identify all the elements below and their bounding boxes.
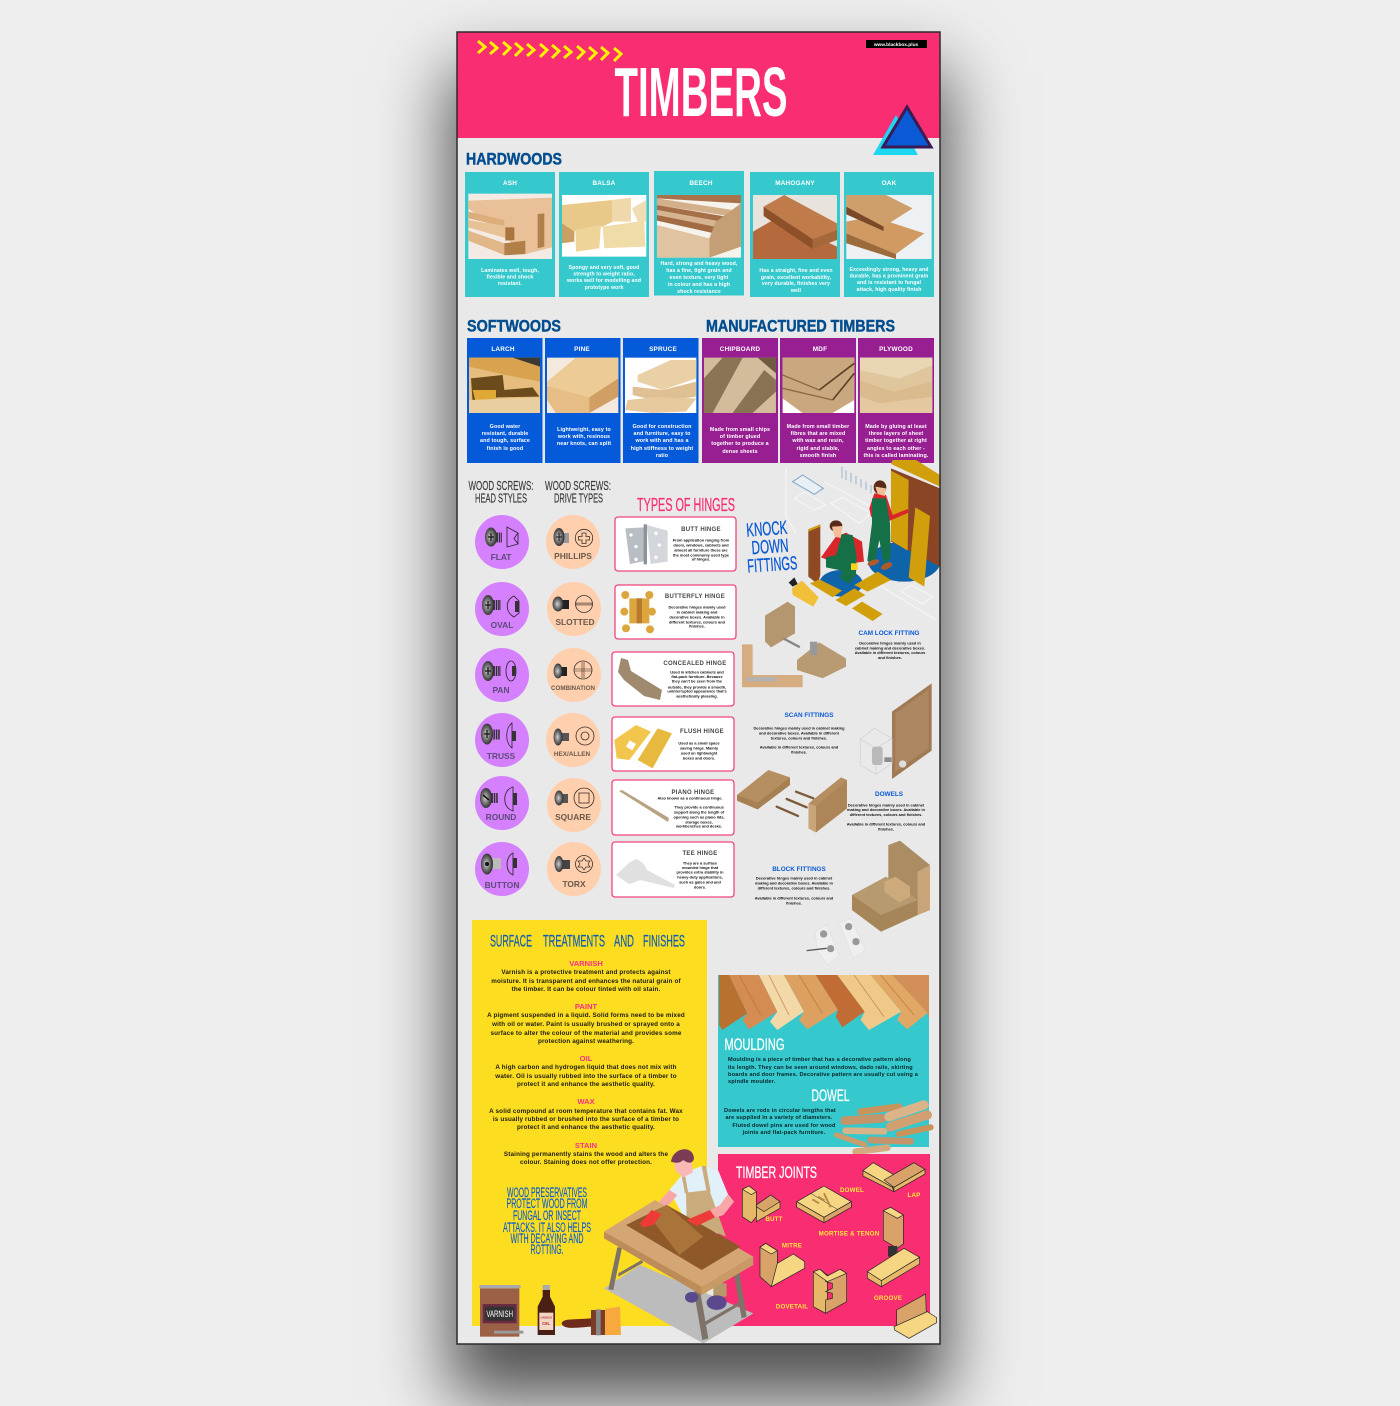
joint: butt xyxy=(742,1186,780,1223)
hinge: tee: heavy-duty applications, xyxy=(677,874,723,880)
card: beech: has a fine, tight grain and xyxy=(666,268,732,274)
joint: groove xyxy=(894,1294,937,1338)
text: varnish: Varnish is a protective treatment and protects against xyxy=(501,969,671,976)
drive: combination xyxy=(547,648,601,702)
heading: surface treatments: SURFACE xyxy=(490,932,532,950)
text: cam lock fitting: CAM LOCK FITTING xyxy=(858,630,920,637)
text: scan fittings: Decorative hinges mainly used in cabinet making xyxy=(753,726,845,730)
screw: button xyxy=(475,842,529,896)
heading: surface treatments: TREATMENTS xyxy=(543,932,605,950)
joint labels: MITRE xyxy=(782,1242,802,1250)
text: dowel description: Fluted dowel pins are used for wood xyxy=(732,1123,836,1129)
worker crouching xyxy=(821,520,864,584)
card: pine xyxy=(545,338,620,463)
joint: mitre xyxy=(760,1243,805,1287)
heading: wood screws drive types: WOOD SCREWS: xyxy=(545,478,611,493)
text: cam lock fitting: Decorative hinges mainly used in xyxy=(859,640,921,646)
image: plywood layers xyxy=(860,358,932,413)
hinge: butterfly: Decorative hinges mainly used xyxy=(668,604,726,610)
panel: hinges xyxy=(612,517,736,897)
screw: truss xyxy=(475,713,529,767)
text: scan fittings: SCAN FITTINGS xyxy=(784,712,834,719)
heading: knock down fittings: KNOCK xyxy=(746,518,788,542)
card: mahogany: well xyxy=(790,288,802,294)
card: larch: finish is good xyxy=(487,446,523,452)
text: dowels: DOWELS xyxy=(875,791,904,798)
triangle logo xyxy=(873,107,931,155)
screw: pan xyxy=(475,648,529,702)
card: mdf xyxy=(780,338,856,463)
screw: flat: FLAT xyxy=(491,552,512,562)
text: oil: A high carbon and hydrogen liquid that does not mix with xyxy=(495,1064,677,1071)
hinge: butt: BUTT HINGE xyxy=(681,527,721,533)
card: spruce: SPRUCE xyxy=(649,346,677,353)
text: scan fittings: finishes. xyxy=(791,750,807,754)
text: scan fittings xyxy=(753,712,845,754)
text: dowels: different textures, colours and finishes. xyxy=(850,812,922,817)
card: mahogany: Has a straight, fine and even xyxy=(759,268,833,274)
text: paint: with oil or water. Paint is usually brushed or sprayed onto a xyxy=(491,1021,680,1028)
panel: surface treatments xyxy=(472,920,707,1326)
text: moulding description: Moulding is a piece of timber that has a decorative pattern along xyxy=(728,1057,911,1063)
card: chipboard: together to produce a xyxy=(711,441,770,447)
text: cam lock fitting xyxy=(855,630,925,660)
text: wood preservatives: FUNGAL OR INSECT xyxy=(513,1208,581,1223)
illustration: block fitting xyxy=(807,841,930,965)
card: larch: LARCH xyxy=(491,346,515,353)
heading: knock down fittings: FITTINGS xyxy=(747,553,798,578)
icon: piano hinge xyxy=(619,790,669,822)
illustration: varnish can: VARNISH xyxy=(486,1309,513,1319)
drive: torx xyxy=(547,842,601,896)
card: pine: PINE xyxy=(574,346,590,353)
drive: combination: COMBINATION xyxy=(551,685,595,692)
text: wood preservatives xyxy=(503,1185,591,1257)
text: paint: PAINT xyxy=(575,1002,597,1011)
heading: wood screws drive types: DRIVE TYPES xyxy=(554,490,603,506)
drive: phillips: PHILLIPS xyxy=(554,551,592,561)
screw: oval: OVAL xyxy=(491,620,513,630)
drive: square: SQUARE xyxy=(555,812,591,822)
card: spruce: ratio xyxy=(656,453,669,459)
illustration: dowel fitting xyxy=(737,770,847,832)
card: ash xyxy=(465,172,555,297)
image: pine plank xyxy=(547,358,618,413)
card: oak: attack, high quality finish xyxy=(857,287,921,293)
hinge: concealed: aesthetically pleasing. xyxy=(676,694,718,698)
hinge: butterfly: in cabinet making and xyxy=(677,610,718,614)
card: pine: near knots, can split xyxy=(557,441,611,447)
screw: round: ROUND xyxy=(486,812,516,822)
hinge: concealed: uninterrupted appearance that's xyxy=(667,688,727,694)
joint: lap xyxy=(863,1163,925,1192)
card: mahogany xyxy=(750,172,840,297)
hinge: tee: doors. xyxy=(694,884,706,890)
card: mahogany: grain, excellent workability, xyxy=(761,275,832,281)
drive: torx: TORX xyxy=(562,879,586,889)
text: varnish: the timber. It can be colour tinted with oil stain. xyxy=(512,986,660,993)
icon: concealed hinge xyxy=(618,658,662,700)
text: block fittings: Decorative hinges mainly used in cabinet xyxy=(756,876,833,880)
text: dowel description: Dowels are rods in circular lengths that xyxy=(724,1108,836,1114)
image: dowel pins xyxy=(837,1105,931,1152)
card: mdf: fibres that are mixed xyxy=(791,431,845,437)
hinge: tee: provides extra stability in xyxy=(677,870,724,874)
text: oil: protect it and enhance the aesthetic quality. xyxy=(517,1081,655,1088)
hinge: butt: of hinges. xyxy=(692,556,710,562)
card: oak: and is resistant to fungal xyxy=(857,280,921,286)
joint labels: MORTISE & TENON xyxy=(819,1230,880,1238)
hinge: piano: Also known as a continuous hinge. xyxy=(657,796,723,800)
text: wax: is usually rubbed or brushed into the surface of a timber to xyxy=(493,1116,679,1123)
heading: surface treatments: FINISHES xyxy=(643,932,685,950)
joint labels: DOWEL xyxy=(840,1187,864,1194)
heading: wood screws head styles: HEAD STYLES xyxy=(475,490,527,506)
illustration: workers assembling wardrobe xyxy=(786,460,940,621)
card: oak xyxy=(844,172,934,297)
heading: types of hinges: TYPES OF HINGES xyxy=(637,495,735,515)
text: wood preservatives: ATTACKS. IT ALSO HELPS xyxy=(503,1220,591,1235)
text: wax: A solid compound at room temperature that contains fat. Wax xyxy=(489,1108,683,1115)
card: plywood: three layers of sheet xyxy=(869,431,923,437)
heading: moulding: MOULDING xyxy=(724,1035,784,1054)
heading: manufactured timbers: MANUFACTURED TIMBERS xyxy=(706,318,895,336)
text: dowels xyxy=(847,791,926,832)
card: larch xyxy=(467,338,542,463)
hinge: concealed: flat-pack furniture. Because xyxy=(671,674,723,679)
card: balsa: strength to weight ratio, xyxy=(573,272,635,278)
image: mahogany planks xyxy=(753,195,837,259)
joint: dovetail xyxy=(813,1269,847,1313)
hinge: tee xyxy=(612,842,734,897)
text: varnish: VARNISH xyxy=(569,959,603,968)
card: ash: resistant. xyxy=(498,281,522,287)
screw drive types column xyxy=(546,515,601,896)
stained board xyxy=(626,1205,741,1270)
card: spruce xyxy=(623,338,698,463)
icon: butterfly hinge xyxy=(620,591,656,633)
text: paint: A pigment suspended in a liquid. Solid forms need to be mixed xyxy=(487,1012,685,1019)
panel: hardwoods cards xyxy=(465,171,934,297)
text: dowel description: are supplied in a variety of diameters. xyxy=(725,1115,833,1121)
image: spruce planks xyxy=(625,358,696,413)
drive: slotted xyxy=(547,582,601,636)
card: oak: OAK xyxy=(882,180,897,187)
text: wood preservatives: PROTECT WOOD FROM xyxy=(506,1196,588,1211)
wardrobe xyxy=(891,460,940,587)
hinge: flush xyxy=(612,717,734,771)
heading: softwoods: SOFTWOODS xyxy=(467,318,561,336)
drive: slotted: SLOTTED xyxy=(555,617,595,627)
card: beech xyxy=(654,171,744,296)
screw: round xyxy=(475,776,529,830)
text: block fittings: making and decorative boxes. Available in xyxy=(755,880,834,886)
icon: flush hinge xyxy=(614,725,672,768)
card: beech: Hard, strong and heavy wood, xyxy=(661,261,738,267)
image: larch timber xyxy=(469,358,540,413)
card: balsa xyxy=(559,172,649,297)
illustration: linseed oil bottle: LINSEED xyxy=(541,1315,552,1319)
text: wood preservatives: WOOD PRESERVATIVES xyxy=(507,1185,587,1200)
screw: button: BUTTON xyxy=(485,880,519,890)
text: dowels: Available in different textures, colours and xyxy=(847,822,926,826)
text: stain: colour. Staining does not offer protection. xyxy=(520,1159,652,1166)
heading: hardwoods: HARDWOODS xyxy=(466,150,562,168)
arrow chevrons xyxy=(478,41,621,61)
text: paint: protection against weathering. xyxy=(538,1038,634,1045)
hinge: butterfly xyxy=(615,585,736,639)
hinge: piano: workbenches and desks. xyxy=(675,824,722,828)
hinge: flush: Used as a small space xyxy=(678,740,720,746)
text: varnish xyxy=(491,959,682,993)
icon: butt hinge xyxy=(625,524,668,564)
card: larch: and tough, surface xyxy=(480,438,530,444)
joint labels: BUTT xyxy=(765,1216,783,1223)
hinge: butt: doors, windows, cabinets and xyxy=(673,542,729,548)
heading: surface treatments xyxy=(490,932,685,950)
joint labels: GROOVE xyxy=(874,1295,902,1302)
image: oak planks xyxy=(846,195,932,259)
card: plywood xyxy=(858,338,934,463)
card: plywood: timber together at right xyxy=(865,438,927,444)
text: moulding description: boards and door frames. Decorative pattern are usually cut using a xyxy=(728,1072,919,1078)
heading: timber joints: TIMBER JOINTS xyxy=(736,1163,817,1182)
screw: truss: TRUSS xyxy=(487,751,516,761)
panel: softwoods cards xyxy=(467,338,698,463)
hinge: piano: storage boxes, xyxy=(685,820,713,824)
card: spruce: work with and has a xyxy=(634,438,689,444)
text: dowel description: joints and flat-pack furniture. xyxy=(742,1130,826,1136)
toolbox xyxy=(789,577,819,607)
card: mahogany: MAHOGANY xyxy=(775,180,815,187)
hinge: flush: boxes and doors. xyxy=(683,756,715,760)
wood panels xyxy=(808,524,891,621)
card: beech: even texture, very light xyxy=(670,275,729,281)
hinge: butterfly: finishes. xyxy=(689,624,705,628)
hinge: butt: From application ranging from xyxy=(673,538,730,542)
panel: manufactured timbers cards xyxy=(702,338,934,463)
card: beech: BEECH xyxy=(689,180,713,187)
card: mdf: with wax and resin, xyxy=(791,438,844,444)
text: wax: protect it and enhance the aesthetic quality. xyxy=(517,1124,655,1131)
card: plywood: this is called laminating. xyxy=(864,453,929,459)
heading: wood screws drive types xyxy=(545,478,611,506)
joint illustrations xyxy=(742,1163,937,1338)
hinge: piano: opening such as piano lids, xyxy=(673,814,725,820)
card: balsa: prototype work xyxy=(585,285,623,291)
text: paint xyxy=(487,1002,685,1045)
panel: timber joints xyxy=(718,1154,937,1338)
text: block fittings xyxy=(755,866,834,906)
card: balsa: Spongy and very soft, good xyxy=(569,265,639,271)
card: mdf: smooth finish xyxy=(800,453,836,459)
hinge: butt xyxy=(615,517,736,571)
hinge: butterfly: different textures, colours and xyxy=(669,620,726,624)
hinge: flush: saving hinge. Mainly xyxy=(680,746,719,750)
card: pine: work with, resinous xyxy=(557,434,610,440)
card: chipboard: Made from small chips xyxy=(710,427,770,433)
text: dowels: finishes. xyxy=(878,826,894,832)
image: chipboard sheets xyxy=(704,358,776,413)
card: plywood: Made by gluing at least xyxy=(865,424,927,430)
hinge: concealed xyxy=(612,652,734,706)
image: moulding strips xyxy=(719,975,929,1030)
card: larch: resistant, durable xyxy=(482,431,528,437)
card: mdf: MDF xyxy=(813,346,827,353)
text: wood preservatives: WITH DECAYING AND xyxy=(510,1231,584,1246)
text: cam lock fitting: cabinet making and decorative boxes. xyxy=(855,646,925,650)
hinge: tee: such as gates and and xyxy=(679,880,721,884)
text: cam lock fitting: and finishes. xyxy=(878,655,902,660)
website tag xyxy=(866,40,927,48)
card: mdf: Made from small timber xyxy=(787,424,850,430)
text: block fittings: BLOCK FITTINGS xyxy=(772,866,827,873)
text: stain: STAIN xyxy=(575,1141,597,1150)
hinge: butterfly: decorative boxes. Available in xyxy=(669,614,725,620)
icon: tee hinge xyxy=(616,859,675,888)
joint labels xyxy=(765,1187,920,1310)
hinge: concealed: CONCEALED HINGE xyxy=(663,661,727,667)
text: block fittings: different textures, colours and finishes. xyxy=(758,886,830,890)
image: mdf boards xyxy=(783,358,854,413)
card: oak: durable, has a prominent grain xyxy=(850,274,928,280)
image: balsa blocks xyxy=(562,195,646,257)
card: ash: flexible and shock xyxy=(487,274,533,280)
table legs xyxy=(608,1247,747,1340)
heading: surface treatments: AND xyxy=(614,932,634,950)
hinge: butt: the most commonly used type xyxy=(673,552,730,558)
hinge: tee: mounted hinge that xyxy=(682,865,719,870)
hinge: concealed: they can't be seen from the xyxy=(672,678,723,684)
illustration: linseed oil bottle xyxy=(538,1285,555,1335)
drive: phillips xyxy=(546,515,600,569)
card: mahogany: very durable, finishes very xyxy=(762,281,830,287)
title: TIMBERS xyxy=(614,53,788,131)
card: balsa: works well for modelling and xyxy=(566,278,641,284)
man xyxy=(653,1149,734,1310)
card: chipboard: CHIPBOARD xyxy=(720,346,760,353)
card: ash: Laminates well, tough, xyxy=(481,268,539,274)
heading: dowel: DOWEL xyxy=(812,1086,850,1105)
card: plywood: PLYWOOD xyxy=(879,346,913,353)
heading: knock down fittings: DOWN xyxy=(751,536,789,559)
text: scan fittings: textures, colours and finishes. xyxy=(771,736,827,740)
hinge: piano xyxy=(612,780,734,835)
text: scan fittings: and decorative boxes. Available in different xyxy=(759,730,840,736)
text: stain: Staining permanently stains the wood and alters the xyxy=(504,1151,668,1158)
hinge: piano: PIANO HINGE xyxy=(672,790,714,796)
hinge: tee: TEE HINGE xyxy=(682,851,718,857)
text: block fittings: finishes. xyxy=(786,900,802,906)
card: pine: Lightweight, easy to xyxy=(557,427,612,433)
image: ash planks xyxy=(468,194,552,259)
card: oak: Exceedingly strong, heavy and xyxy=(849,267,929,273)
card: beech: shock resistance xyxy=(677,289,721,295)
hinge: flush: FLUSH HINGE xyxy=(680,729,724,735)
text: oil xyxy=(494,1054,677,1088)
text: wax: WAX xyxy=(577,1097,595,1106)
hinge: flush: used on lightweight xyxy=(681,750,718,756)
card: chipboard: of timber glued xyxy=(720,434,760,440)
text: moulding description: its length. They can be seen around windows, dado rails, skirting xyxy=(728,1065,913,1071)
card: plywood: angles to each other - xyxy=(867,446,925,452)
text: dowels: Decorative hinges mainly used in cabinet xyxy=(848,802,925,808)
screw: pan: PAN xyxy=(492,685,510,695)
joint labels: DOVETAIL xyxy=(776,1304,808,1310)
hinge: butt: almost all furniture these are xyxy=(674,548,728,552)
card: spruce: and furniture, easy to xyxy=(633,431,691,437)
heading: knock down fittings xyxy=(744,517,798,578)
text: block fittings: Available in different textures, colours and xyxy=(755,896,834,900)
table top xyxy=(604,1200,753,1287)
hinge: tee: They are a surface xyxy=(683,860,718,866)
illustration: scan fitting xyxy=(860,683,932,779)
header band xyxy=(457,32,940,138)
panel: moulding and dowel xyxy=(718,975,931,1152)
illustration: man staining table xyxy=(604,1149,753,1343)
website tag: www.blackbox.plus xyxy=(873,42,918,48)
hinge: piano: support along the length of xyxy=(674,810,725,814)
illustration: cam lock fitting xyxy=(742,602,846,687)
card: chipboard: dense sheets xyxy=(722,449,758,455)
text: wax xyxy=(489,1097,683,1131)
text: moulding description: spindle moulder. xyxy=(728,1079,776,1085)
text: varnish: moisture. It is transparent and enhances the natural grain of xyxy=(491,978,682,985)
card: mdf: rigid and stable, xyxy=(796,446,840,452)
text: wood preservatives: ROTTING. xyxy=(530,1242,564,1257)
illustration: paintbrush xyxy=(562,1307,621,1335)
card: spruce: high stiffness to weight xyxy=(631,446,693,452)
hinge: butterfly: BUTTERFLY HINGE xyxy=(665,594,725,600)
hinge: concealed: Used in kitchen cabinets and xyxy=(670,670,724,674)
heading: wood screws head styles xyxy=(468,478,534,506)
text: moulding description xyxy=(728,1057,919,1085)
text: dowel description xyxy=(724,1108,836,1136)
text: oil: water. Oil is usually rubbed into the surface of a timber to xyxy=(494,1073,677,1080)
drive: hex/allen: HEX/ALLEN xyxy=(554,751,590,758)
card: spruce: Good for construction xyxy=(632,424,692,430)
text: paint: surface to alter the colour of the material and provides some xyxy=(490,1030,682,1037)
illustration: varnish can xyxy=(479,1285,523,1337)
joint labels: LAP xyxy=(908,1192,920,1199)
card: ash: ASH xyxy=(503,180,517,187)
illustration: linseed oil bottle: OIL xyxy=(542,1321,550,1327)
card: beech: in colour and has a high xyxy=(668,282,730,288)
card: larch: Good water xyxy=(490,424,521,430)
joint: mortise and tenon xyxy=(867,1207,920,1287)
hinge: piano: They provide a continuous xyxy=(674,804,724,810)
hinge: concealed: outside, they provide a smooth, xyxy=(668,684,726,690)
screw head styles column xyxy=(475,515,529,896)
worker standing xyxy=(867,480,909,571)
text: cam lock fitting: Available in different textures, colours xyxy=(855,650,925,655)
card: chipboard xyxy=(702,338,778,463)
screw: flat xyxy=(475,515,529,569)
text: stain xyxy=(504,1141,668,1166)
screw: oval xyxy=(475,582,529,636)
heading: wood screws head styles: WOOD SCREWS: xyxy=(468,478,534,493)
text: scan fittings: Available in different textures, colours and xyxy=(760,744,839,750)
text: dowels: making and decorative boxes. Available in xyxy=(847,807,926,812)
sheet background xyxy=(457,32,940,1344)
card: balsa: BALSA xyxy=(592,180,616,187)
image: beech boards xyxy=(657,195,741,258)
drive: square xyxy=(547,778,601,832)
drive: hex/allen xyxy=(546,713,600,767)
joint: dowel xyxy=(797,1186,851,1223)
text: oil: OIL xyxy=(580,1054,593,1063)
